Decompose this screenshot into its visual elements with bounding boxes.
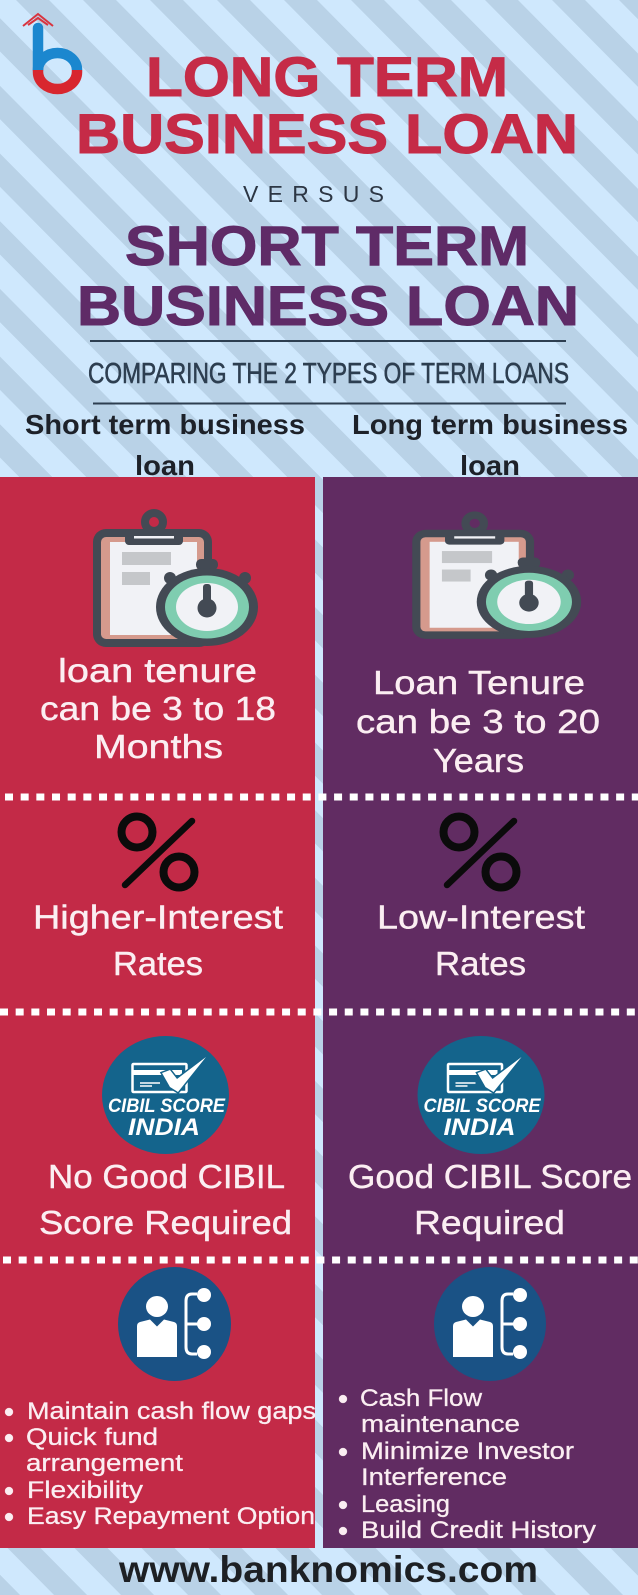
list: short term benefits <box>5 1398 316 1530</box>
icon: clipboard and stopwatch, short term <box>93 513 258 647</box>
list: long term benefits: Leasing <box>361 1491 450 1518</box>
list: short term benefits: arrangement <box>26 1450 183 1477</box>
title: short term business loan: SHORT TERM <box>125 214 529 277</box>
dotted divider 3 <box>3 1256 638 1264</box>
panel: short term column <box>0 477 315 1548</box>
icon: cibil score badge, short term: CIBIL SCORE <box>108 1096 226 1117</box>
text: no good cibil score required <box>39 1158 292 1241</box>
column heading: short term: loan <box>135 450 195 481</box>
icon: percent, long term <box>444 816 516 888</box>
dotted divider 1 <box>5 794 638 800</box>
icon: person with list, long term <box>434 1267 546 1381</box>
text: short term tenure <box>40 652 276 765</box>
text: good cibil score required <box>348 1158 632 1241</box>
list: long term benefits: maintenance <box>361 1411 520 1438</box>
column heading: short term: Short term business <box>25 409 305 440</box>
text: low interest rates: Low-Interest <box>377 898 585 936</box>
list: short term benefits: Flexibility <box>27 1477 143 1504</box>
list: short term benefits: Easy Repayment Option <box>27 1503 315 1530</box>
title: short term business loan: BUSINESS LOAN <box>77 274 579 337</box>
text: higher interest rates: Higher-Interest <box>33 898 283 936</box>
list: long term benefits: Interference <box>361 1464 507 1491</box>
text: higher interest rates: Rates <box>113 945 203 982</box>
text: short term tenure: can be 3 to 18 <box>40 690 276 727</box>
text: long term tenure: can be 3 to 20 <box>356 703 600 740</box>
icon: cibil score badge, short term: INDIA <box>128 1114 200 1141</box>
text: low interest rates <box>377 898 585 982</box>
text: short term tenure: loan tenure <box>58 652 257 689</box>
text: good cibil score required: Good CIBIL Score <box>348 1158 632 1195</box>
icon: cibil score badge, long term: INDIA <box>444 1114 516 1141</box>
column heading: long term: Long term business <box>352 409 628 440</box>
icon: cibil score badge, short term <box>102 1036 229 1154</box>
list: long term benefits: Minimize Investor <box>361 1438 574 1465</box>
icon: banknomics logo <box>23 14 77 89</box>
list: long term benefits: Build Credit History <box>361 1517 596 1544</box>
title: short term business loan <box>77 214 579 337</box>
text: higher interest rates <box>33 898 283 982</box>
column heading: long term: loan <box>460 450 520 481</box>
versus label: VERSUS <box>243 181 384 207</box>
icon: percent, short term <box>122 816 194 888</box>
text: long term tenure: Years <box>433 742 524 779</box>
column heading: long term <box>352 409 628 481</box>
text: short term tenure: Months <box>94 728 223 765</box>
text: long term tenure: Loan Tenure <box>373 664 585 701</box>
text: good cibil score required: Required <box>414 1204 565 1241</box>
icon: clipboard and stopwatch, long term <box>412 515 581 639</box>
list: long term benefits <box>339 1385 596 1544</box>
text: no good cibil score required: Score Required <box>39 1204 292 1241</box>
text: long term tenure <box>356 664 600 779</box>
column heading: short term <box>25 409 305 481</box>
icon: cibil score badge, long term <box>418 1036 544 1154</box>
title: long term business loan <box>76 45 578 165</box>
list: short term benefits: Maintain cash flow gaps <box>27 1398 316 1425</box>
icon: person with list, short term <box>118 1267 231 1381</box>
title: long term business loan: BUSINESS LOAN <box>76 102 578 165</box>
list: long term benefits: Cash Flow <box>360 1385 483 1412</box>
title: long term business loan: LONG TERM <box>146 45 508 108</box>
list: short term benefits: Quick fund <box>26 1424 158 1451</box>
text: no good cibil score required: No Good CIBIL <box>48 1158 285 1195</box>
panel: long term column <box>323 477 638 1548</box>
website url: www.banknomics.com <box>118 1549 538 1590</box>
text: low interest rates: Rates <box>435 945 526 982</box>
icon: cibil score badge, long term: CIBIL SCORE <box>424 1096 542 1117</box>
dotted divider 2 <box>0 1008 638 1016</box>
